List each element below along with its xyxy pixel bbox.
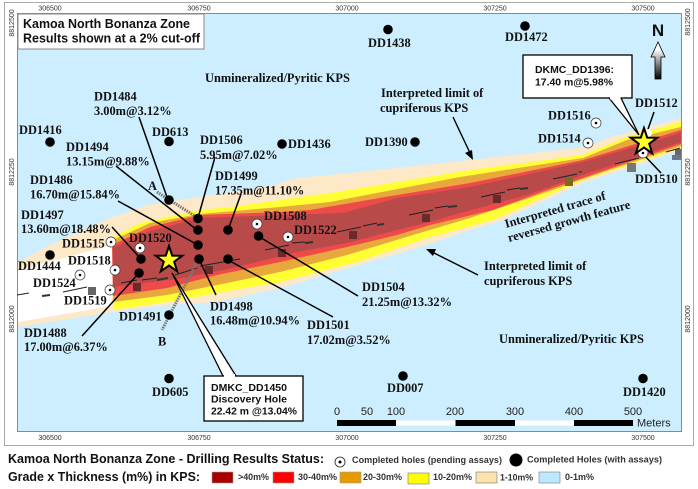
axis labels: 307250 [483,6,507,12]
drill hole labels: DD1518 [68,254,111,268]
drill hole labels: 17.00m@6.37% [24,340,108,354]
legend item: 20-30: 20-30m% [363,472,403,483]
legend icon: completed holes [510,454,522,466]
legend item: 10-20 [408,472,473,484]
drill hole labels: DD1522 [294,223,337,237]
axis labels: 307000 [335,6,359,12]
callout: DKMC_DD1396: 17.40 m@5.98% [535,76,614,88]
drill hole labels: 16.70m@15.84% [30,188,120,202]
scale bar: 500 [624,406,642,418]
annotation: upper limit text [380,86,484,115]
legend heading: drilling status: Kamoa North Bonanza Zone - Drilling Results Status: [8,452,324,466]
drill hole labels: DD1520 [129,231,172,245]
drill hole labels: DD1390 [365,135,408,149]
band 10-20m% [113,122,681,310]
drill hole labels [18,30,678,399]
drill hole labels: DD1486 [30,173,73,187]
scale bar: 50 [361,406,373,418]
drill hole labels: DD1497 [21,208,64,222]
band 20-30m% [113,127,681,302]
drill hole labels: DD1519 [64,294,107,308]
drill hole labels: DD1501 [307,318,350,332]
axis labels: 306500 [38,6,62,12]
drill hole labels: 13.60m@18.48% [21,222,111,236]
scale bar: 0 [334,406,340,418]
axis labels: 8812250 [9,158,16,186]
drill hole labels: DD1516 [548,108,591,122]
drill hole labels: DD1472 [505,30,548,44]
annotation: lower limit text [484,259,587,288]
drill hole labels: DD613 [152,125,188,139]
drill hole labels: DD1444 [18,259,61,273]
drill hole labels: DD1514 [538,132,581,146]
drill hole labels: 16.48m@10.94% [210,314,300,328]
axis labels: 8812000 [9,305,16,333]
drill hole labels: DD1491 [119,310,162,324]
legend text: pending holes: Completed holes (pending assays) [352,455,502,466]
blank unmodelled area [18,245,112,322]
callout: DMKC_DD1450 discovery hole: DMKC_DD1450 [211,382,287,394]
legend item: over 40 [212,472,270,483]
star: discovery hole [156,246,182,271]
axis labels: 8812250 [685,158,692,186]
reversed growth feature trace [17,148,681,296]
axis labels: 306500 [38,435,62,442]
north arrow: N [652,21,664,40]
drill hole labels: DD1484 [94,90,137,104]
drill hole labels: DD1506 [200,133,243,147]
drill hole labels: DD1515 [62,236,105,250]
drill hole labels: 13.15m@9.88% [66,154,150,168]
drill hole labels: DD1420 [623,385,666,399]
title box: Results shown at a 2% cut-off [23,32,201,46]
annotation: lower limit text: cupriferous KPS [484,274,572,288]
drill hole labels: DD1504 [362,280,405,294]
drill hole labels: 17.35m@11.10% [215,184,304,198]
title box [18,14,204,49]
drill hole labels: 3.00m@3.12% [94,104,172,118]
annotation: reversed growth feature: reversed growth feature [506,197,632,245]
drill hole labels: DD007 [387,381,423,395]
band over 40m% [113,133,681,287]
legend item: 1-10: 1-10m% [500,472,533,484]
band 30-40m% [112,130,681,296]
pending assay holes [75,118,652,295]
legend item: 1-10 [476,472,533,484]
callout: DMKC_DD1450 discovery hole [172,273,303,421]
scale bar: 400 [565,406,583,418]
axis labels: 307500 [631,6,655,12]
drill hole labels: DD1524 [33,276,76,290]
axis labels: 306750 [187,435,211,442]
drill hole labels: B [158,334,166,348]
scale bar: Meters [637,418,671,430]
drill hole labels: DD1436 [288,137,331,151]
axis labels: 8812000 [685,305,692,333]
axis labels: 306750 [187,6,211,12]
annotation: upper limit text: Interpreted limit of [381,86,484,100]
arrow: upper limit of cupriferous KPS [453,117,473,160]
scale bar: 100 [387,406,405,418]
callout: DMKC_DD1450 discovery hole: Discovery Hole [211,394,287,406]
drill hole labels: DD1508 [264,209,307,223]
drill hole labels: DD1498 [210,300,253,314]
annotation: upper limit text: cupriferous KPS [380,101,468,115]
drill hole labels: DD1438 [368,36,411,50]
legend item: 30-40: 30-40m% [298,472,338,483]
drill hole labels: DD1499 [215,169,258,183]
completed holes with assays [45,21,648,383]
drill hole labels: DD1488 [24,326,67,340]
drill hole labels: DD1494 [66,140,109,154]
callout: DKMC_DD1396 [523,55,639,135]
drill hole labels: DD605 [152,385,188,399]
legend heading: grade x thickness: Grade x Thickness (m%) in KPS: [8,470,200,484]
callout: DKMC_DD1396: DKMC_DD1396: [535,64,614,76]
legend item: 0-1: 0-1m% [565,472,595,483]
legend item: 20-30 [340,472,403,483]
legend item: over 40: >40m% [238,472,270,483]
annotation: reversed growth feature: Interpreted trace of [503,188,608,231]
annotation: top unmineralized zone: Unmineralized/Pyritic KPS [205,71,350,85]
north arrow [651,21,665,79]
annotation: lower limit text: Interpreted limit of [484,259,587,273]
axis labels: 8812500 [9,9,16,37]
leader lines [82,112,661,336]
legend item: 10-20: 10-20m% [433,472,473,483]
scale bar [334,406,671,430]
axis labels: 307000 [335,435,359,442]
legend [8,452,662,484]
scale bar: 200 [446,406,464,418]
drill hole labels: 17.02m@3.52% [307,333,391,347]
drill hole labels: 5.95m@7.02% [200,148,278,162]
drill hole labels: 21.25m@13.32% [362,295,452,309]
legend icon: pending holes [335,457,345,467]
star: DKMC_DD1396 [631,128,657,153]
drill hole labels: DD1416 [19,123,62,137]
band 1-10m% [18,118,681,327]
legend item: 0-1 [539,472,595,483]
scale bar: 300 [506,406,524,418]
legend text: completed holes: Completed Holes (with assays) [527,454,662,466]
axis labels: 307250 [483,435,507,442]
drill hole labels: DD1512 [635,96,678,110]
title box: Kamoa North Bonanza Zone [23,17,190,31]
axis labels: 8812500 [685,8,692,36]
drill hole labels: A [148,179,157,193]
drill hole labels: DD1510 [635,172,678,186]
annotation: bottom unmineralized zone: Unmineralized/Pyritic KPS [499,332,644,346]
legend item: 30-40 [273,472,338,483]
axis labels: 307500 [631,435,655,442]
arrow: lower limit of cupriferous KPS [426,249,478,275]
callout: DMKC_DD1450 discovery hole: 22.42 m @13.04% [211,406,298,418]
section line A-B [157,192,199,330]
